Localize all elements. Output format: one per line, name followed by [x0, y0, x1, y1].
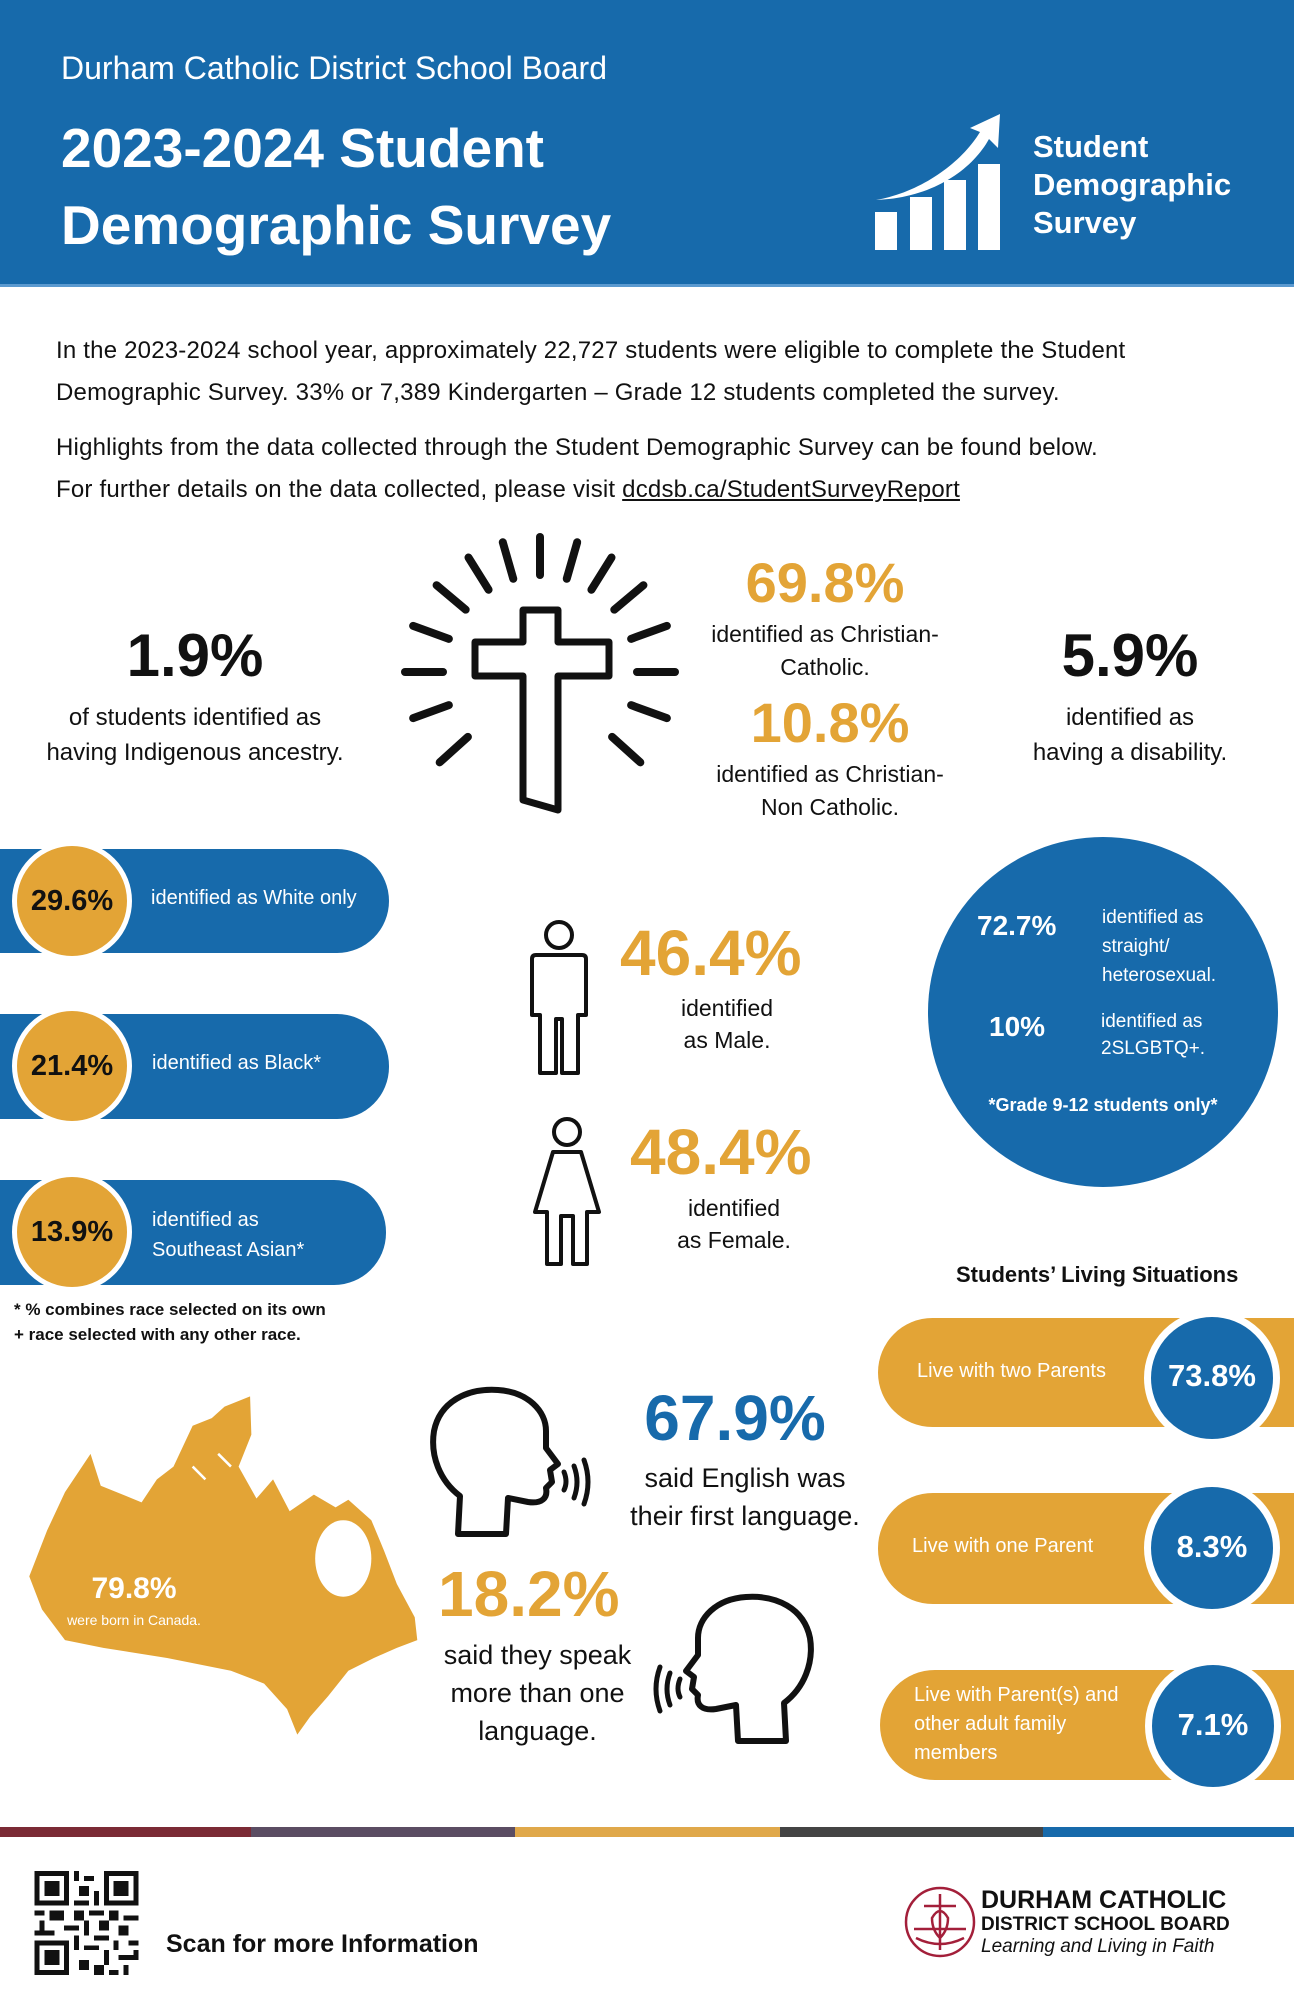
badge: 21.4% [31, 1050, 113, 1082]
icon: cross with rays [401, 533, 679, 814]
race pill: southeast asian: identified as [152, 1209, 259, 1231]
stat: disability: having a disability. [1033, 739, 1227, 766]
footnote: + race selected with any other race. [14, 1325, 301, 1344]
footnote: * % combines race selected on its own [14, 1300, 326, 1319]
text: female [677, 1195, 791, 1253]
stat: indigenous: having Indigenous ancestry. [46, 739, 344, 766]
race pill: black [0, 1014, 389, 1119]
text: male: identified [681, 995, 773, 1021]
badge: 7.1% [1178, 1707, 1248, 1742]
badge: 8.3% [1177, 1529, 1247, 1564]
map: canada [29, 1396, 418, 1734]
logo text: Survey [1033, 205, 1136, 240]
circle: sexual orientation: 2SLGBTQ+. [1101, 1038, 1205, 1059]
heading: living situations: Students’ Living Situations [956, 1262, 1238, 1287]
footnote [14, 1300, 326, 1344]
title [61, 117, 611, 256]
circle: sexual orientation: identified as [1101, 1011, 1202, 1032]
badge: 73.8% [1168, 1358, 1256, 1393]
icon: crest [904, 1886, 976, 1958]
circle: sexual orientation: identified as [1102, 907, 1203, 928]
stat: female: 48.4% [630, 1116, 811, 1188]
header banner [0, 0, 1294, 287]
circle: sexual orientation: straight/ [1102, 936, 1170, 957]
stat: christian non catholic [716, 691, 944, 820]
race pill: southeast asian: Southeast Asian* [152, 1239, 304, 1261]
logo text: Demographic [1033, 167, 1231, 202]
intro text: Demographic Survey. 33% or 7,389 Kindergarten – Grade 12 students completed the survey. [56, 379, 1060, 406]
text: male [681, 995, 773, 1053]
stat: english first language: 67.9% [644, 1382, 826, 1454]
race pill: southeast asian [0, 1180, 386, 1285]
map: canada: 79.8% [91, 1572, 177, 1605]
intro text: Highlights from the data collected through the Student Demographic Survey can be found below. [56, 434, 1098, 461]
logo: DCDSB [904, 1886, 1230, 1958]
text: english: their first language. [630, 1501, 860, 1531]
stat: christian non catholic: 10.8% [751, 691, 909, 754]
living pill: parents + family: other adult family [914, 1713, 1066, 1735]
stat: indigenous [46, 622, 344, 766]
living pill: parents + family [880, 1670, 1294, 1780]
logo: DCDSB: DISTRICT SCHOOL BOARD [981, 1914, 1230, 1935]
title: 2023-2024 Student [61, 117, 544, 179]
color stripe [0, 1827, 1294, 1837]
text: multilingual: said they speak [444, 1640, 631, 1670]
QR code [34, 1871, 138, 1975]
logo text: Student [1033, 129, 1148, 164]
logo: DCDSB: Learning and Living in Faith [981, 1936, 1214, 1957]
text: multilingual: language. [478, 1716, 597, 1746]
living pill: one parent [878, 1493, 1294, 1604]
scan text: Scan for more Information [166, 1930, 479, 1958]
living pill: parents + family: Live with Parent(s) and [914, 1684, 1119, 1706]
living pill: two parents [878, 1318, 1294, 1427]
intro text: In the 2023-2024 school year, approximately 22,727 students were eligible to complete the Student [56, 337, 1125, 364]
stat: disability: identified as [1066, 704, 1194, 731]
stat: christian non catholic: Non Catholic. [761, 794, 899, 820]
title: Demographic Survey [61, 194, 611, 256]
stat: disability: 5.9% [1062, 622, 1198, 689]
badge: 13.9% [31, 1216, 113, 1248]
logo text [1033, 129, 1231, 240]
icon: head speaking right [430, 1386, 590, 1537]
circle: sexual orientation: heterosexual. [1102, 965, 1216, 986]
circle: sexual orientation [928, 837, 1278, 1187]
stat: indigenous: 1.9% [127, 622, 263, 689]
stat: christian catholic [711, 551, 939, 680]
icon: rising bar chart [875, 114, 1000, 250]
text: female: identified [688, 1195, 780, 1221]
badge [12, 1006, 132, 1126]
living pill: parents + family: members [914, 1742, 997, 1764]
badge [1144, 1480, 1280, 1616]
stat: indigenous: of students identified as [69, 704, 321, 731]
icon: head speaking left [654, 1594, 814, 1744]
icon: male [530, 920, 588, 1075]
text: female: as Female. [677, 1227, 791, 1253]
badge [12, 1172, 132, 1292]
badge [12, 841, 132, 961]
map: canada: were born in Canada. [67, 1612, 201, 1628]
race pill: black: identified as Black* [152, 1052, 321, 1074]
stat: christian catholic: identified as Christian- [711, 621, 939, 647]
race pill: white [0, 849, 389, 953]
circle: sexual orientation: *Grade 9-12 students only* [988, 1095, 1218, 1115]
subtitle: Durham Catholic District School Board [61, 50, 607, 86]
living pill: one parent: Live with one Parent [912, 1535, 1093, 1557]
badge: 29.6% [31, 885, 113, 917]
stat: disability [1033, 622, 1227, 766]
stat: male: 46.4% [620, 917, 801, 989]
text: male: as Male. [684, 1027, 770, 1053]
circle: sexual orientation: 10% [989, 1011, 1045, 1042]
icon: female [533, 1117, 601, 1266]
stat: christian catholic: Catholic. [780, 654, 870, 680]
living pill: two parents: Live with two Parents [917, 1360, 1106, 1382]
logo: DCDSB: DURHAM CATHOLIC [981, 1886, 1226, 1914]
intro text: For further details on the data collected, please visit dcdsb.ca/StudentSurveyReport [56, 476, 960, 503]
text: english: said English was [644, 1463, 846, 1493]
text: multilingual: more than one [450, 1678, 625, 1708]
circle: sexual orientation: 72.7% [977, 910, 1056, 941]
race pill: white: identified as White only [151, 887, 357, 909]
stat: multilingual: 18.2% [438, 1558, 619, 1630]
intro text [56, 337, 1125, 503]
badge [1144, 1310, 1280, 1446]
text: english [630, 1463, 860, 1531]
text: multilingual [444, 1640, 632, 1746]
stat: christian catholic: 69.8% [746, 551, 904, 614]
badge [1145, 1658, 1281, 1794]
stat: christian non catholic: identified as Christian- [716, 761, 944, 787]
